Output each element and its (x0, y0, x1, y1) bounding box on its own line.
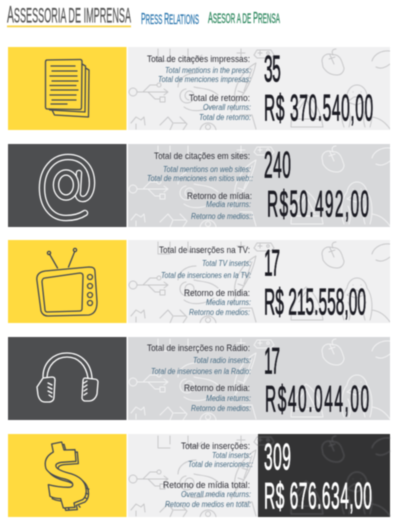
number: press returns: R$ 370.540,00 (264, 88, 373, 130)
panel: radio (8, 337, 390, 429)
labels: press mentions: Total de citações impressas: (147, 53, 250, 64)
labels: total returns: Retorno de mídia total: (163, 479, 250, 490)
info background: totals (128, 434, 390, 517)
info background: web (128, 144, 390, 227)
icon tile: press (8, 47, 126, 130)
doodle pattern (129, 49, 390, 139)
labels: web mentions: Total de citações em sites: (154, 150, 250, 161)
labels: press returns (189, 92, 251, 122)
labels: radio returns: Retorno de medios: (191, 404, 251, 413)
number: tv mentions: 17 (264, 243, 280, 285)
panel: totals (8, 434, 390, 526)
number: radio mentions: 17 (264, 341, 280, 383)
labels: radio returns (184, 382, 251, 413)
icon tile: tv (8, 240, 126, 323)
labels: tv mentions: Total de inserções na TV: (159, 244, 250, 255)
labels: web returns: Retorno de medios:: (191, 212, 253, 221)
info background: radio (128, 337, 390, 420)
labels: tv mentions: Total TV inserts: (202, 259, 251, 268)
icon tile: totals (8, 434, 126, 517)
labels: press mentions: Total mentions in the press: (165, 66, 251, 75)
icon: at sign (42, 157, 92, 218)
labels: total mentions: Total inserts: (212, 451, 251, 460)
labels: tv returns: Media returns: (206, 298, 251, 307)
icon: dollar sign (45, 442, 89, 510)
labels: press mentions: Total de menciones impresas: (158, 75, 251, 84)
icon tile: web (8, 144, 126, 227)
labels: tv returns (184, 287, 251, 317)
labels: press returns: Total de retorno: (189, 92, 250, 103)
labels: tv mentions (159, 244, 251, 280)
labels: press returns: Total de retorno: (199, 113, 251, 122)
info background: tv (128, 240, 390, 323)
labels: tv returns: Retorno de medios: (189, 308, 250, 317)
dark numbers background (258, 434, 390, 517)
subtitle: Spanish: ASESOR A DE PRENSA (208, 10, 280, 27)
labels: total returns: Retorno de medios en total: (165, 500, 251, 509)
labels: radio mentions (147, 342, 251, 376)
labels: total returns (163, 479, 251, 509)
panel: web (8, 144, 390, 236)
number: web mentions: 240 (264, 145, 291, 187)
labels: total mentions (181, 440, 253, 469)
labels: web mentions: Total mentions on web sites: (163, 165, 251, 174)
labels: tv mentions: Total de inserciones en la TV: (161, 271, 251, 280)
number: total mentions: 309 (264, 437, 291, 479)
icon: television (37, 248, 97, 316)
icon tile: radio (8, 337, 126, 420)
panel: press (8, 47, 390, 139)
labels: total mentions: Total de inserções: (181, 440, 250, 451)
labels: radio mentions: Total de inserciones en la Radio: (151, 367, 251, 376)
subtitle: English: PRESS RELATIONS (141, 11, 199, 28)
labels: web returns: Retorno de mídia: (187, 190, 252, 201)
labels: web mentions (147, 150, 253, 183)
number: web returns: R$50.492,00 (267, 184, 369, 226)
title (7, 2, 131, 28)
doodle pattern (129, 339, 390, 429)
number: total returns: R$ 676.634,00 (264, 476, 372, 518)
labels: radio mentions: Total de inserções no Rádio: (147, 342, 250, 353)
labels: web returns: Media returns: (206, 200, 251, 209)
labels: web mentions: Total de menciones en sitios web:: (147, 174, 253, 183)
labels: radio returns: Retorno de mídia: (184, 382, 250, 393)
icon: documents (46, 60, 89, 117)
dark doodle pattern (258, 435, 391, 516)
labels: total returns: Overall media returns: (181, 490, 251, 499)
labels: press mentions (147, 53, 251, 84)
text: ASSESSORIA DE IMPRENSA (7, 2, 131, 28)
doodle pattern (129, 146, 390, 236)
labels: tv returns: Retorno de mídia: (184, 287, 250, 298)
labels: press returns: Overall returns: (203, 103, 251, 112)
labels: total mentions: Total de inserciones:: (188, 460, 253, 469)
labels: web returns (187, 190, 253, 221)
number: radio returns: R$40.044,00 (265, 379, 369, 421)
labels: radio returns: Media returns: (206, 394, 251, 403)
panel: tv (8, 240, 390, 332)
info background: press (128, 47, 390, 130)
number: tv returns: R$ 215.558,00 (264, 282, 366, 324)
number: press mentions: 35 (264, 49, 281, 91)
doodle pattern (129, 436, 390, 526)
doodle pattern (129, 242, 390, 332)
icon: headphones (37, 353, 98, 402)
labels: radio mentions: Total radio inserts: (193, 356, 251, 365)
